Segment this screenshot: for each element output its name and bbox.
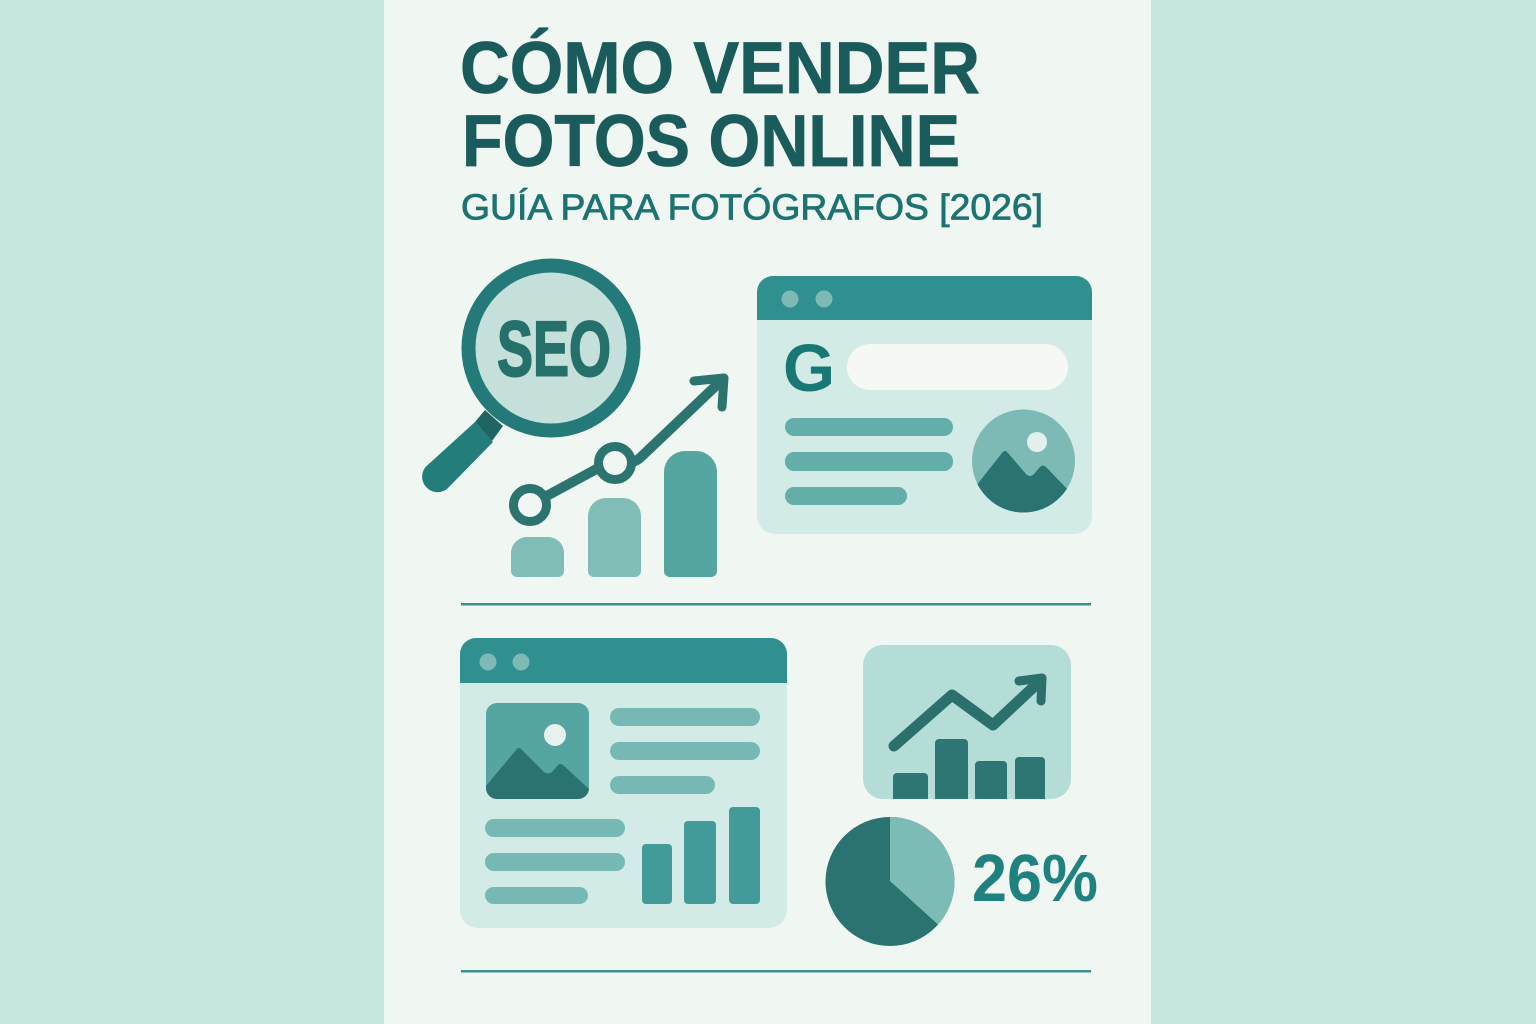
arrow head (694, 378, 724, 407)
trend line (530, 380, 722, 505)
bar: medium (588, 498, 641, 577)
divider (461, 970, 1091, 972)
magnifier collar (475, 410, 503, 441)
panel: website browser window (460, 638, 787, 928)
icon: SEO magnifying glass (422, 266, 634, 492)
title: CÓMO VENDER (460, 28, 980, 109)
title (460, 28, 980, 182)
panel: search browser window (757, 276, 1092, 534)
window dots (782, 290, 832, 308)
text lines right (610, 708, 760, 794)
search box (847, 344, 1068, 390)
statistic: 26%: 26% (972, 841, 1098, 916)
chart: growth bars with trend arrow (511, 378, 724, 577)
magnifier lens (468, 266, 634, 430)
search logo G: G (783, 331, 835, 406)
image thumbnail (972, 410, 1075, 520)
window dots (480, 654, 530, 670)
card background (863, 645, 1071, 799)
chart bars (893, 739, 1045, 799)
mini bar chart (642, 807, 760, 904)
trend point 2 (598, 446, 632, 480)
bar: small (511, 537, 564, 577)
panel: analytics chart card (863, 645, 1071, 799)
trend point 1 (514, 488, 546, 522)
subtitle: GUÍA PARA FOTÓGRAFOS [2026] (461, 186, 1043, 228)
panel: central page (384, 0, 1151, 1024)
browser body (757, 276, 1092, 534)
divider (461, 603, 1091, 606)
title: FOTOS ONLINE (462, 101, 960, 182)
browser header (460, 638, 787, 683)
pie chart (826, 817, 954, 946)
trend line (894, 682, 1039, 746)
browser header (757, 276, 1092, 320)
text lines left (485, 819, 625, 904)
bar: tall (664, 451, 717, 577)
SEO label: SEO (497, 304, 611, 392)
image placeholder (486, 703, 589, 799)
magnifier handle (422, 422, 493, 492)
trend arrow head (1019, 678, 1042, 701)
result lines (785, 418, 953, 505)
browser body (460, 638, 787, 928)
